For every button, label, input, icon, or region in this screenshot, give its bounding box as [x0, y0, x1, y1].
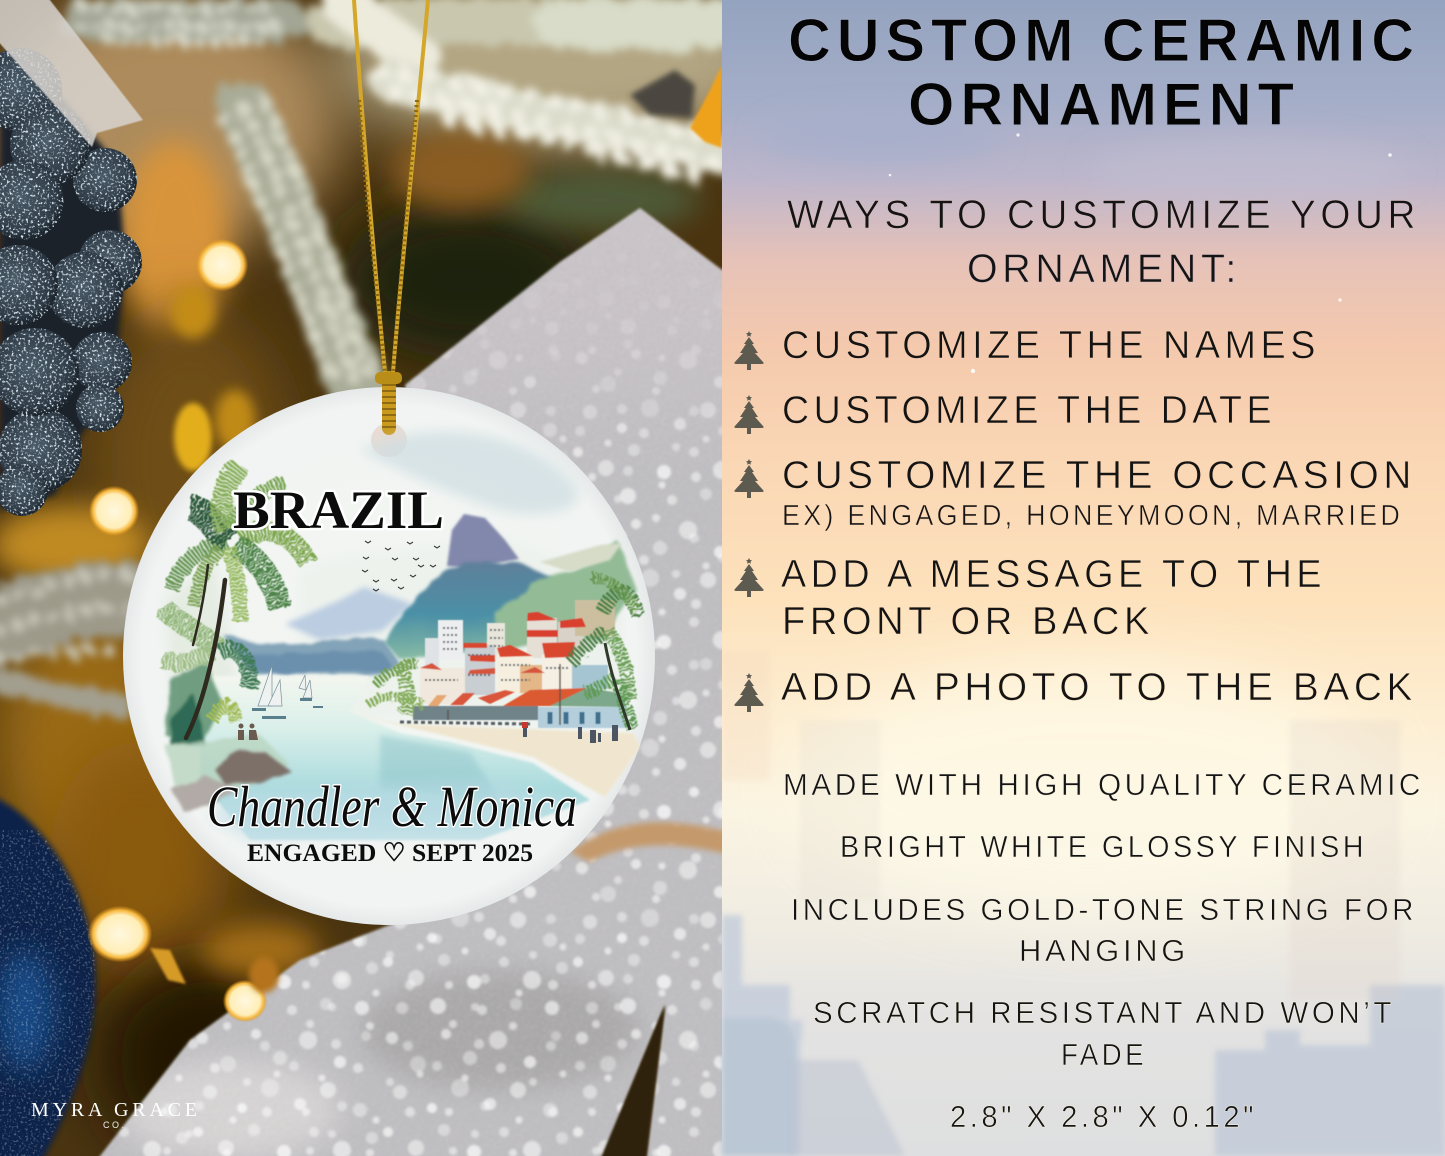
illustration: water [200, 676, 590, 840]
couple names: Chandler & Monica [207, 774, 577, 839]
city silhouettes [722, 650, 1445, 1156]
silver glitter ribbon [98, 206, 722, 1156]
illustration: birds [362, 541, 440, 591]
photo background [0, 0, 790, 1156]
illustration: blue range [223, 635, 402, 676]
dark bauble in the branches [630, 70, 695, 118]
dark blue bauble [0, 795, 100, 1156]
illustration: rocks [172, 750, 292, 810]
icon: tree [734, 331, 764, 370]
illustration: sitting figures [238, 724, 258, 740]
illustration: far mountain [285, 587, 413, 640]
subtitle [787, 193, 1420, 291]
illustration: sugarloaf peak [447, 514, 519, 568]
product features: FADE [1061, 1037, 1147, 1072]
illustration: boats [258, 665, 312, 706]
title: ORNAMENT [908, 71, 1300, 138]
ornament [123, 372, 655, 925]
product features: 2.8" X 2.8" X 0.12" [950, 1099, 1257, 1134]
product features: HANGING [1019, 933, 1189, 968]
customization item: message: ADD A MESSAGE TO THE [781, 553, 1326, 596]
illustration: left palm fronds [162, 465, 308, 722]
upper clouds [760, 115, 1410, 200]
illustration: pale sky washes [165, 432, 620, 720]
illustration: green mountain [382, 560, 561, 660]
customization item: occasion: EX) ENGAGED, HONEYMOON, MARRIED [782, 500, 1403, 532]
hanging hole [371, 423, 407, 457]
icon: tree [734, 558, 764, 597]
sheer ribbon [0, 0, 143, 147]
illustration: people on promenade [522, 722, 618, 743]
frosted pine branches [0, 0, 722, 706]
icon: tree [734, 459, 764, 498]
dark gap in ribbon [598, 1005, 665, 1156]
amber reflection [690, 65, 722, 148]
illustration: town palms [368, 578, 638, 728]
illustration: palm trunks [186, 565, 225, 738]
tan rope band [570, 822, 730, 862]
illustration: town [400, 600, 627, 728]
title: CUSTOM CERAMIC [788, 7, 1420, 74]
brand watermark: CO. [103, 1120, 124, 1130]
product features: SCRATCH RESISTANT AND WON’T [813, 995, 1395, 1030]
icon: tree [734, 673, 764, 712]
product features [783, 767, 1424, 1134]
illustration: boat hulls [252, 698, 323, 719]
product features: MADE WITH HIGH QUALITY CERAMIC [783, 767, 1424, 802]
occasion and date: ENGAGED ♡ SEPT 2025 [247, 838, 533, 867]
left panel: product photo [0, 0, 790, 1156]
customization item: names: CUSTOMIZE THE NAMES [782, 324, 1320, 367]
customization item: occasion: CUSTOMIZE THE OCCASION [782, 454, 1416, 497]
customization item: date: CUSTOMIZE THE DATE [782, 389, 1276, 432]
subtitle: ORNAMENT: [967, 247, 1241, 291]
customization item: photo: ADD A PHOTO TO THE BACK [781, 666, 1417, 709]
illustration: water reflection [380, 735, 500, 800]
subtitle: WAYS TO CUSTOMIZE YOUR [787, 193, 1420, 237]
illustration: name wash [210, 780, 565, 840]
illustration: beach [345, 712, 640, 797]
right panel [722, 0, 1445, 1156]
sky background [722, 0, 1445, 1156]
icon: tree [734, 395, 764, 434]
stars [889, 58, 1392, 373]
illustration: left palm undergrowth [165, 660, 290, 795]
string knot [375, 372, 402, 428]
product features: BRIGHT WHITE GLOSSY FINISH [840, 829, 1367, 864]
bokeh lights [88, 239, 279, 1022]
brand watermark: MYRA GRACE [31, 1099, 197, 1121]
product features: INCLUDES GOLD-TONE STRING FOR [791, 892, 1417, 927]
illustration: right hill [495, 542, 636, 650]
place name: BRAZIL [233, 480, 444, 540]
title [788, 7, 1420, 138]
customization item: occasion [734, 454, 1416, 532]
illustration: right palm trunk [605, 643, 630, 730]
customization item: message [734, 553, 1326, 643]
customization item: message: FRONT OR BACK [782, 600, 1154, 643]
pale glow [800, 660, 1380, 920]
glitter bauble cluster [0, 45, 145, 525]
ceramic disc [123, 387, 655, 925]
gold string [354, 0, 428, 372]
